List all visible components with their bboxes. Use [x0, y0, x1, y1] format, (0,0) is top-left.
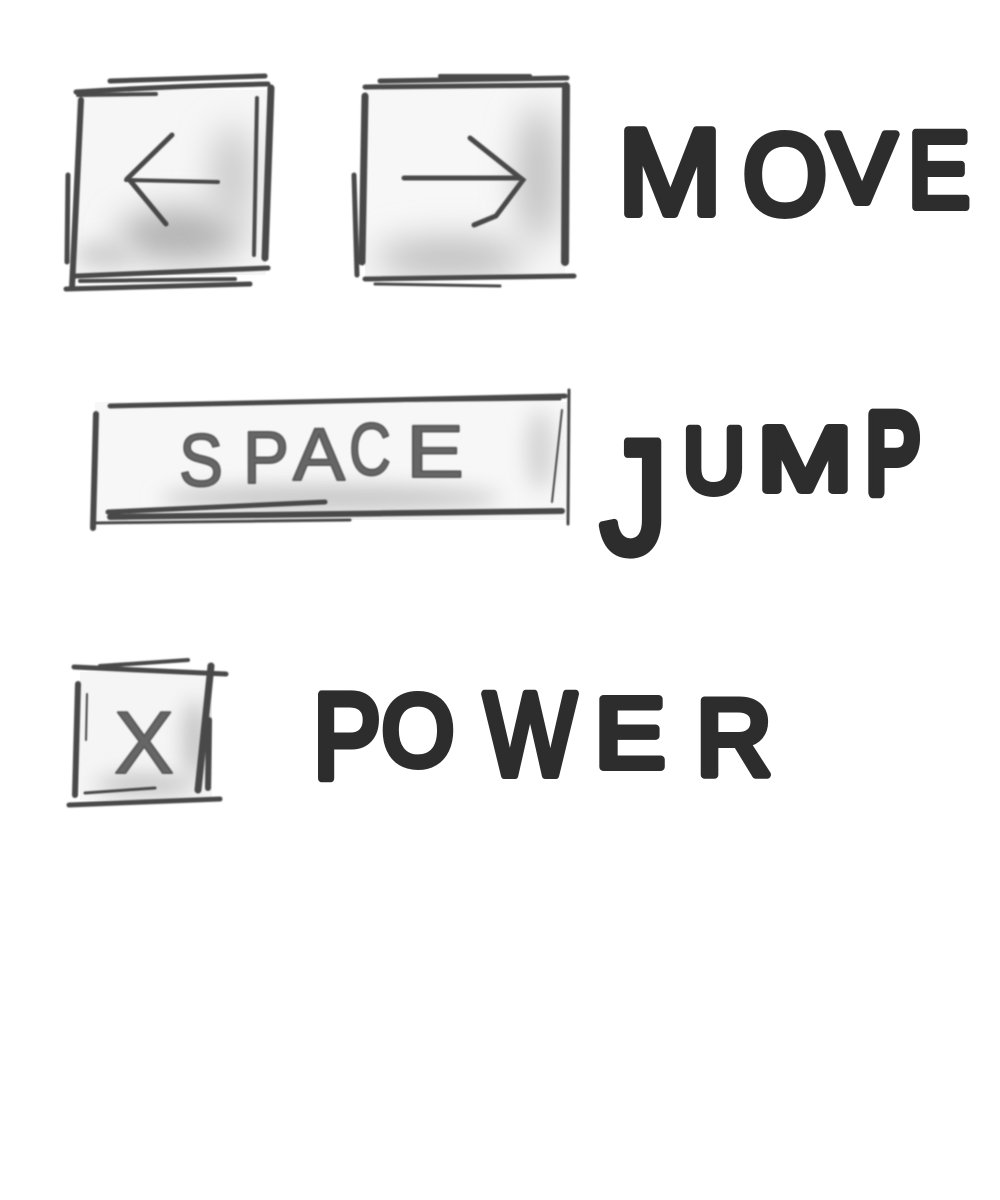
label: POWER: E — [595, 678, 665, 788]
label: JUMP: U — [683, 410, 745, 512]
key label: SPACE: A — [293, 413, 346, 496]
label: MOVE: V — [828, 113, 896, 223]
key: right arrow — [354, 76, 574, 286]
label: POWER: O — [382, 675, 454, 787]
key: X — [69, 660, 226, 805]
key label: SPACE: C — [349, 408, 391, 491]
key label: SPACE: S — [179, 419, 223, 502]
key label: X: X — [114, 693, 174, 792]
label: JUMP: M — [758, 410, 852, 510]
key label: SPACE: E — [406, 410, 464, 493]
label: MOVE: O — [743, 112, 827, 239]
icon: right arrow — [404, 138, 523, 225]
label: MOVE: M — [618, 104, 722, 240]
label: MOVE: E — [908, 109, 970, 230]
label: JUMP — [600, 391, 920, 588]
key: left arrow — [66, 76, 271, 289]
label: JUMP: P — [866, 391, 920, 516]
key: space bar — [93, 390, 569, 528]
label: POWER: W — [484, 669, 576, 801]
label: POWER: R — [696, 677, 772, 798]
label: POWER — [313, 668, 772, 804]
icon: left arrow — [126, 135, 218, 224]
label: POWER: P — [313, 668, 381, 804]
label: MOVE — [618, 104, 970, 240]
key label: SPACE: P — [243, 416, 289, 499]
key label: SPACE — [179, 408, 464, 502]
label: JUMP: J — [600, 407, 668, 588]
